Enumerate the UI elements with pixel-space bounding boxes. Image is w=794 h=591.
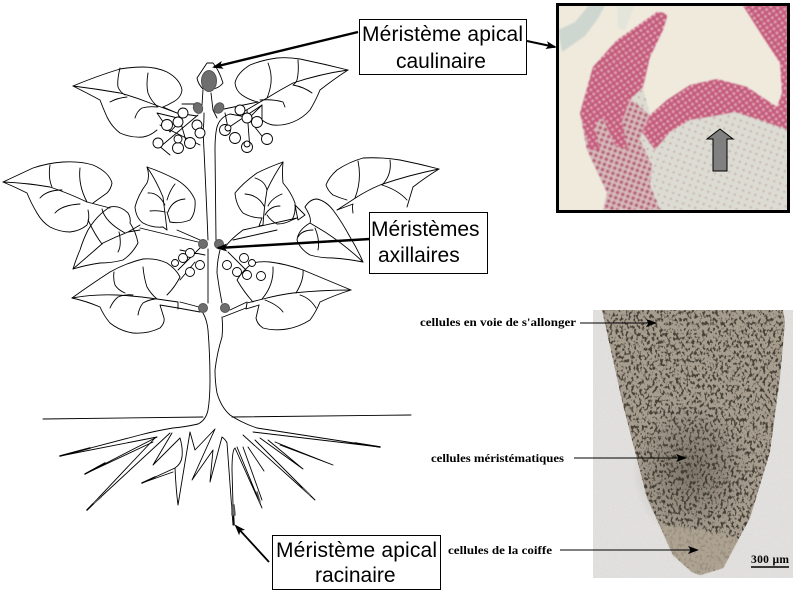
tissue base	[580, 40, 788, 210]
scale bar: 300 µm	[751, 554, 789, 566]
caption: root cap cells: cellules de la coiffe	[448, 543, 553, 557]
leaf: lower left lobed	[73, 207, 140, 269]
arrow: root label to root tip	[236, 526, 269, 562]
arrow: axillary label to bud	[218, 239, 370, 248]
label: axillary meristems: Méristèmes	[371, 218, 480, 241]
leaf: top right	[235, 58, 348, 125]
leaf: top left	[73, 67, 182, 137]
caption: meristematic cells: cellules méristématiques	[431, 451, 564, 465]
leaf: lower right lobed	[297, 199, 363, 262]
flower clusters	[153, 105, 272, 280]
label: apical root meristem	[272, 536, 440, 590]
leaf: lower left	[72, 259, 180, 333]
apical bud	[197, 63, 223, 92]
label: apical shoot meristem	[360, 20, 526, 74]
axillary buds	[192, 101, 230, 312]
leaf: lower right	[237, 262, 351, 330]
leaf: middle inner right	[235, 162, 295, 226]
stem	[198, 90, 257, 428]
meristem shading	[632, 400, 752, 540]
root cap	[660, 525, 738, 575]
plant line drawing	[3, 58, 439, 525]
leaf: middle far left	[3, 162, 112, 232]
root outline with cells	[602, 310, 785, 575]
label: apical root meristem: racinaire	[315, 564, 396, 587]
photo: root tip micrograph	[593, 310, 793, 578]
arrow: apical label to bud	[214, 32, 358, 67]
label: apical shoot meristem: Méristème apical	[362, 23, 523, 46]
arrow: apical label to photo	[527, 41, 555, 47]
pink leaf primordium	[580, 12, 667, 150]
pink dome band	[642, 79, 788, 150]
label: axillary meristems	[370, 212, 488, 274]
ground line	[43, 415, 411, 419]
grey debris	[558, 4, 635, 52]
photo: shoot apex micrograph	[557, 4, 788, 212]
leaf: middle inner left	[135, 167, 195, 230]
leaf: middle far right	[326, 158, 439, 213]
roots	[60, 424, 380, 525]
branches	[128, 102, 305, 317]
lower-left pink cells	[580, 67, 660, 210]
label: apical shoot meristem: caulinaire	[396, 50, 486, 73]
caption: elongating cells: cellules en voie de s'allonger	[420, 315, 577, 329]
grey arrow	[707, 129, 733, 171]
label: axillary meristems: axillaires	[378, 244, 460, 267]
label: apical root meristem: Méristème apical	[276, 539, 437, 562]
pink right leaf	[742, 4, 788, 115]
